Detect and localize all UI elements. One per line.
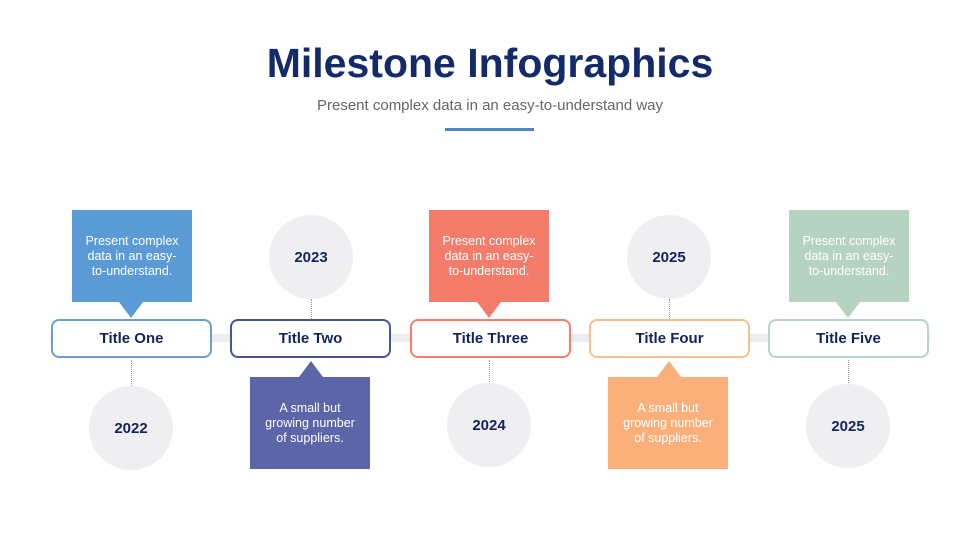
callout box 1 <box>72 210 192 302</box>
year circle 2022: 2022 <box>114 420 148 436</box>
pill 5 <box>768 319 929 358</box>
callout box 2 <box>250 377 370 469</box>
subtitle: Present complex data in an easy-to-understand way <box>317 97 663 114</box>
pointer 2 <box>299 361 323 377</box>
callout box 5: to-understand. <box>809 264 889 278</box>
pill 5: Title Five <box>816 330 881 347</box>
callout box 5: Present complex <box>802 234 896 248</box>
pill 4: Title Four <box>635 330 704 347</box>
callout box 1: data in an easy- <box>88 248 176 262</box>
pill 3 <box>410 319 571 358</box>
callout box 4 <box>608 377 728 469</box>
callout box 3 <box>429 210 549 302</box>
callout box 5: data in an easy- <box>805 248 893 262</box>
callout box 2: A small but <box>279 400 341 414</box>
callout box 3: to-understand. <box>449 264 529 278</box>
year circle 2025 <box>627 215 711 299</box>
dotted line 5 <box>848 360 849 385</box>
pointer 3 <box>477 302 501 318</box>
callout box 1: to-understand. <box>92 264 172 278</box>
callout box 3: data in an easy- <box>445 248 533 262</box>
year circle 2025: 2025 <box>831 418 865 434</box>
milestone 3 <box>410 210 571 467</box>
milestone 4 <box>589 215 750 469</box>
pill 3: Title Three <box>453 330 528 347</box>
callout box 3: Present complex <box>442 234 536 248</box>
year circle 2025 <box>806 384 890 468</box>
year circle 2025: 2025 <box>652 248 686 266</box>
milestone 1 <box>51 210 212 470</box>
pill 2: Title Two <box>279 330 342 347</box>
callout box 4: growing number <box>623 416 713 430</box>
pill 1 <box>51 319 212 358</box>
connector bars <box>50 334 930 342</box>
pointer 4 <box>657 361 681 377</box>
underline accent <box>445 128 534 131</box>
year circle 2023: 2023 <box>294 248 328 266</box>
year circle 2023 <box>269 215 353 299</box>
year circle 2022 <box>89 386 173 470</box>
pointer 1 <box>119 302 143 318</box>
dotted line 1 <box>131 360 132 386</box>
milestone 2 <box>230 215 391 469</box>
callout box 1: Present complex <box>85 234 179 248</box>
milestone 5 <box>768 210 929 468</box>
callout box 4: of suppliers. <box>634 430 702 444</box>
callout box 2: of suppliers. <box>276 430 344 444</box>
dotted line 2 <box>311 299 312 319</box>
callout box 4: A small but <box>637 400 699 414</box>
year circle 2024 <box>447 383 531 467</box>
dotted line 3 <box>489 360 490 384</box>
title: Milestone Infographics <box>267 40 713 86</box>
year circle 2024: 2024 <box>472 416 506 434</box>
callout box 2: growing number <box>265 416 355 430</box>
dotted line 4 <box>669 299 670 319</box>
pill 4 <box>589 319 750 358</box>
pill 2 <box>230 319 391 358</box>
callout box 5 <box>789 210 909 302</box>
pointer 5 <box>836 302 860 318</box>
pill 1: Title One <box>100 330 163 347</box>
